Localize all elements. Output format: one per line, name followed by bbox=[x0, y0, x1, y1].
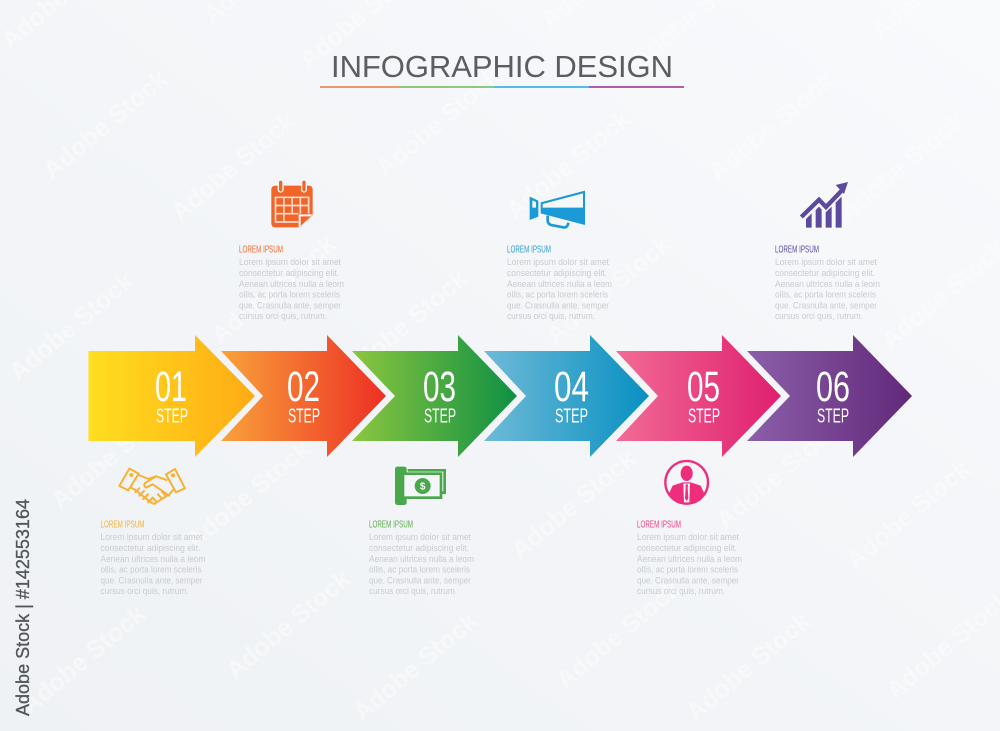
text: Adobe Stock bbox=[166, 107, 301, 227]
text block: bottom step 05 bbox=[637, 520, 742, 596]
text: Adobe Stock bbox=[541, 230, 676, 350]
body text: consectetur adipiscing elit. bbox=[637, 543, 737, 553]
text: Adobe Stock bbox=[841, 455, 976, 575]
heading: LOREM IPSUM bbox=[239, 244, 283, 256]
step 02 arrow: STEP bbox=[288, 406, 320, 428]
step 05 arrow bbox=[616, 335, 781, 457]
body text: cursus orci quis, rutrum. bbox=[100, 586, 188, 596]
body text: cursus orci quis, rutrum. bbox=[507, 311, 595, 321]
body text: Aenean ultrices nulla a leom bbox=[100, 554, 206, 564]
step 04 arrow bbox=[484, 335, 649, 457]
body text: Aenean ultrices nulla a leom bbox=[239, 279, 344, 289]
text: Adobe Stock bbox=[221, 565, 356, 685]
body text: ollis, ac porta lorem sceleris bbox=[369, 564, 470, 574]
text block: bottom step 01 bbox=[100, 520, 206, 596]
text: Adobe Stock bbox=[681, 607, 816, 727]
text: Adobe Stock bbox=[506, 445, 641, 565]
arrow process: six steps bbox=[88, 335, 912, 457]
heading: LOREM IPSUM bbox=[369, 520, 413, 530]
heading: LOREM IPSUM bbox=[507, 244, 551, 256]
body text: cursus orci quis, rutrum. bbox=[239, 311, 327, 321]
body text bbox=[369, 532, 474, 596]
body text: Lorem ipsum dolor sit amet bbox=[775, 257, 877, 267]
text: Adobe Stock bbox=[338, 265, 473, 385]
heading: LOREM IPSUM bbox=[100, 520, 144, 530]
text: Adobe Stock bbox=[181, 435, 316, 555]
step 05 arrow: 05 bbox=[687, 363, 720, 411]
step 02 arrow bbox=[221, 335, 386, 457]
text: Adobe Stock bbox=[704, 67, 839, 187]
step 02 arrow: 02 bbox=[287, 363, 320, 411]
body text: consectetur adipiscing elit. bbox=[239, 268, 339, 278]
body text: que. Crasnulla ante, semper bbox=[100, 575, 203, 585]
body text: Aenean ultrices nulla a leom bbox=[369, 554, 474, 564]
text: Adobe Stock bbox=[206, 230, 341, 350]
text block: top step 02 bbox=[239, 244, 344, 321]
step 04 arrow: 04 bbox=[554, 363, 589, 411]
step 05 arrow: STEP bbox=[688, 406, 720, 428]
body text bbox=[637, 532, 742, 596]
icon: money bills: $ bbox=[420, 482, 426, 493]
body text: Lorem ipsum dolor sit amet bbox=[507, 257, 609, 267]
body text: cursus orci quis, rutrum. bbox=[637, 586, 725, 596]
heading: LOREM IPSUM bbox=[775, 244, 819, 256]
step 06 arrow bbox=[747, 335, 912, 457]
heading: LOREM IPSUM bbox=[637, 520, 681, 530]
body text: consectetur adipiscing elit. bbox=[507, 268, 607, 278]
stock id caption: Adobe Stock | #142553164 bbox=[12, 499, 33, 716]
step 06 arrow: STEP bbox=[817, 406, 849, 428]
body text: ollis, ac porta lorem sceleris bbox=[239, 290, 340, 300]
body text: que. Crasnulla ante, semper bbox=[369, 575, 471, 585]
icon: growth chart bbox=[801, 182, 848, 228]
step 04 arrow: STEP bbox=[555, 406, 588, 428]
text: Adobe Stock bbox=[46, 395, 181, 515]
title underline bbox=[320, 86, 684, 88]
icon: businessman bbox=[665, 461, 708, 504]
body text bbox=[239, 257, 344, 321]
body text: ollis, ac porta lorem sceleris bbox=[507, 290, 608, 300]
body text: cursus orci quis, rutrum. bbox=[369, 586, 457, 596]
body text: Lorem ipsum dolor sit amet bbox=[239, 257, 341, 267]
icon: money bills bbox=[395, 467, 446, 505]
body text: que. Crasnulla ante, semper bbox=[507, 300, 609, 310]
text: Adobe Stock bbox=[4, 267, 139, 387]
text block: top step 06 bbox=[775, 244, 880, 321]
icon: handshake bbox=[119, 469, 185, 504]
text: Adobe Stock bbox=[38, 65, 173, 185]
step 01 arrow bbox=[88, 335, 255, 457]
body text: ollis, ac porta lorem sceleris bbox=[637, 564, 738, 574]
text block: top step 04 bbox=[507, 244, 612, 321]
body text: consectetur adipiscing elit. bbox=[775, 268, 875, 278]
body text bbox=[775, 257, 880, 321]
step 06 arrow: 06 bbox=[816, 363, 850, 411]
text: Adobe Stock bbox=[551, 575, 686, 695]
step 01 arrow: STEP bbox=[156, 406, 188, 428]
body text: ollis, ac porta lorem sceleris bbox=[100, 564, 202, 574]
body text: Aenean ultrices nulla a leom bbox=[507, 279, 612, 289]
text block: bottom step 03 bbox=[369, 520, 474, 596]
title: INFOGRAPHIC DESIGN bbox=[331, 49, 673, 84]
body text: Lorem ipsum dolor sit amet bbox=[369, 532, 471, 542]
text: Adobe Stock bbox=[371, 63, 506, 183]
step 03 arrow: 03 bbox=[423, 363, 456, 411]
text: Adobe Stock bbox=[834, 107, 969, 227]
body text: que. Crasnulla ante, semper bbox=[775, 300, 877, 310]
body text: cursus orci quis, rutrum. bbox=[775, 311, 863, 321]
text: Adobe Stock bbox=[501, 105, 636, 225]
text: Adobe Stock bbox=[16, 600, 151, 720]
text: Adobe Stock bbox=[348, 607, 483, 727]
body text: Lorem ipsum dolor sit amet bbox=[637, 532, 739, 542]
body text bbox=[507, 257, 612, 321]
body text: Aenean ultrices nulla a leom bbox=[775, 279, 880, 289]
text: Adobe Stock bbox=[711, 415, 846, 535]
step 03 arrow: STEP bbox=[424, 406, 456, 428]
step 03 arrow bbox=[352, 335, 517, 457]
body text: Lorem ipsum dolor sit amet bbox=[100, 532, 203, 542]
body text: Aenean ultrices nulla a leom bbox=[637, 554, 742, 564]
step 01 arrow: 01 bbox=[155, 363, 187, 411]
body text: consectetur adipiscing elit. bbox=[369, 543, 469, 553]
body text: que. Crasnulla ante, semper bbox=[637, 575, 739, 585]
body text bbox=[100, 532, 206, 596]
body text: ollis, ac porta lorem sceleris bbox=[775, 290, 876, 300]
icon: calendar bbox=[271, 180, 313, 227]
body text: consectetur adipiscing elit. bbox=[100, 543, 200, 553]
body text: que. Crasnulla ante, semper bbox=[239, 300, 341, 310]
icon: megaphone bbox=[530, 191, 585, 227]
